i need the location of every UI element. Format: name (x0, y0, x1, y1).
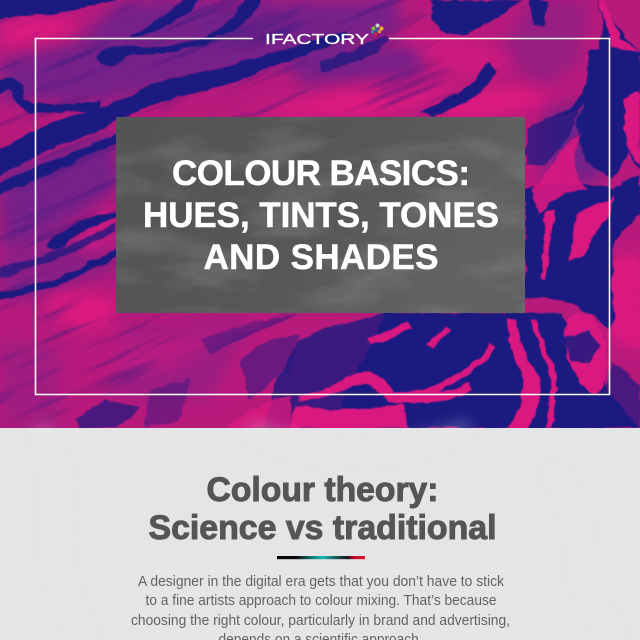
navy: upper right mass (560, 0, 640, 170)
navy: lower mass (330, 313, 640, 428)
main title: COLOUR BASICS: (172, 154, 470, 193)
colour rule divider (277, 556, 365, 559)
logo wordmark: IFACTORY (265, 32, 369, 48)
section heading: Science vs traditional (148, 509, 496, 547)
navy: lower middle speckled (265, 313, 385, 428)
section heading (148, 471, 496, 547)
navy: squiggle left (0, 76, 100, 113)
faint marble texture on lower section (40, 428, 620, 640)
marbled hero image (0, 0, 640, 472)
grey marble texture (116, 117, 525, 313)
section heading: Colour theory: (206, 471, 438, 509)
navy: loop near logo (320, 34, 389, 72)
intro text: A designer in the digital era gets that you don’t have to stick (138, 574, 505, 590)
logo: IFACTORY (265, 24, 384, 48)
white frame (36, 38, 610, 394)
navy: right mid mass (525, 175, 640, 330)
main title: HUES, TINTS, TONES (143, 196, 499, 235)
navy: top strokes (132, 0, 200, 38)
pink: right strands (565, 313, 606, 395)
grey title panel (116, 117, 525, 313)
navy: long diagonal band (0, 30, 348, 178)
main title (143, 154, 499, 277)
background: lower section (0, 428, 640, 640)
navy: left lower strokes (0, 224, 116, 278)
navy: island inside pink (563, 332, 600, 365)
main title: AND SHADES (204, 238, 438, 277)
pink: strands over navy (506, 318, 540, 428)
intro text: choosing the right colour, particularly in brand and advertising, (131, 613, 510, 629)
diagonal marble veins (0, 0, 461, 428)
logo icon (371, 24, 384, 36)
intro text: to a fine artists approach to colour mixing. That’s because (146, 593, 497, 609)
navy: upper right blobs (432, 0, 522, 34)
intro text (131, 574, 510, 640)
